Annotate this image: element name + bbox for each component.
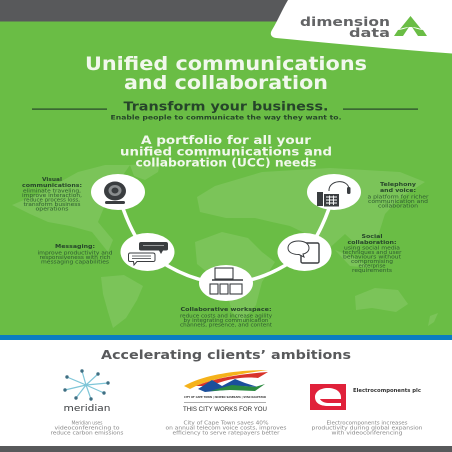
label: messaging: improve productivity and: [38, 250, 112, 256]
client: city of cape town: City of Cape Town saves 40%: [184, 420, 269, 426]
label: social collaboration: compromising: [351, 259, 393, 265]
logo: meridian starburst: [63, 369, 110, 401]
icon: desk phone and headset: [317, 182, 350, 206]
client: electrocomponents: [310, 384, 422, 436]
portfolio heading: unified communications and: [120, 144, 332, 158]
portfolio heading: collaboration (UCC) needs: [136, 156, 317, 170]
client: meridian: Meridian uses: [72, 420, 103, 426]
label: telephony and voice: and voice:: [380, 188, 416, 194]
label: visual communications: eliminate traveling,: [23, 188, 82, 194]
icon: webcam: [104, 182, 126, 204]
node: telephony and voice: [307, 174, 361, 210]
label: visual communications: improve interaction,: [22, 193, 83, 199]
label: telephony and voice: a platform for richer: [368, 194, 430, 200]
label: telephony and voice: [368, 182, 430, 210]
label: collaborative workspace: reduce costs and increase agility: [180, 314, 272, 320]
label: social collaboration: [342, 234, 403, 274]
blue divider strip: [0, 335, 452, 340]
subtitle: transform your business: Transform your business.: [124, 100, 328, 114]
label: social collaboration: collaboration:: [348, 240, 396, 246]
client: meridian: [50, 369, 124, 436]
bottom dark bar: [0, 446, 452, 452]
world map: [12, 163, 438, 328]
label: social collaboration: enterprise: [358, 264, 386, 270]
logo panel: [271, 0, 452, 54]
portfolio heading: A portfolio for all your: [141, 133, 311, 147]
client: city of cape town: CITY OF CAPE TOWN | ISIXEKO SASEKAPA | STAD KAAPSTAD: [184, 395, 267, 399]
white lower panel: [0, 340, 452, 446]
label: visual communications: operations: [36, 206, 69, 212]
client: city of cape town: efficiency to serve ratepayers better: [172, 430, 281, 436]
icon: chat bubbles: [128, 242, 168, 265]
client: electrocomponents: Electrocomponents plc: [353, 388, 421, 394]
subtitle: transform your business: Enable people to communicate the way they want to.: [110, 114, 342, 122]
node: messaging: [120, 233, 174, 271]
client: electrocomponents: Electrocomponents increases: [326, 420, 408, 426]
label: social collaboration: techniques and user: [342, 250, 403, 256]
logo wordmark: data: [349, 25, 390, 40]
top dark bar: [0, 0, 452, 22]
logo triangle icon: [394, 16, 427, 36]
heading: accelerating clients' ambitions: Accelerating clients’ ambitions: [101, 348, 351, 362]
label: collaborative workspace: channels, presence, and content: [180, 322, 272, 328]
green background panel: [0, 21, 452, 336]
label: messaging: responsiveness with rich: [40, 255, 110, 261]
label: collaborative workspace: [180, 307, 272, 328]
title: [85, 53, 367, 94]
label: visual communications: [22, 177, 83, 212]
title: and collaboration: [124, 72, 328, 94]
client: city of cape town: on annual telecom voice costs, improves: [166, 426, 287, 432]
label: social collaboration: behaviours without: [343, 254, 401, 260]
label: collaborative workspace: by integrating communication: [184, 318, 268, 324]
client: city of cape town: THIS CITY WORKS FOR YOU: [183, 406, 267, 413]
client: electrocomponents: with videoconferencing: [332, 430, 402, 436]
client: electrocomponents: productivity during global expansion: [312, 426, 422, 432]
client: meridian: reduce carbon emissions: [50, 430, 124, 436]
node: collaborative workspace: [199, 265, 253, 301]
connecting curve: [118, 192, 334, 283]
label: messaging: [38, 244, 112, 266]
label: telephony and voice: communication and: [368, 199, 428, 205]
subtitle: transform your business: [32, 100, 418, 122]
node: social collaboration: [278, 233, 332, 271]
logo wordmark: dimension: [300, 14, 390, 29]
logo wordmark: [300, 14, 390, 40]
label: collaborative workspace: Collaborative workspace:: [180, 307, 272, 313]
portfolio heading: [120, 133, 332, 170]
icon: devices: [210, 268, 243, 294]
label: telephony and voice: collaboration: [378, 204, 418, 210]
logo: cape town flag mountain: [184, 370, 268, 392]
label: social collaboration: using social media: [344, 246, 400, 252]
logo: electrocomponents red square: [310, 384, 346, 410]
node: visual communications: [91, 174, 145, 210]
icon: tablet and speech bubble: [288, 241, 319, 263]
label: visual communications: transform business: [24, 202, 81, 208]
title: Unified communications: [85, 53, 367, 75]
label: visual communications: Visual: [42, 177, 62, 183]
label: visual communications: communications:: [22, 183, 82, 189]
label: messaging: messaging capabilities: [41, 260, 110, 266]
label: social collaboration: requirements: [352, 268, 393, 274]
label: visual communications: reduce process loss,: [24, 198, 81, 204]
client: meridian: meridian: [64, 404, 110, 414]
client: city of cape town: [166, 370, 287, 436]
label: social collaboration: Social: [362, 234, 383, 240]
label: telephony and voice: Telephony: [380, 182, 417, 188]
client: meridian: videoconferencing to: [54, 426, 120, 432]
label: messaging: Messaging:: [55, 244, 95, 250]
